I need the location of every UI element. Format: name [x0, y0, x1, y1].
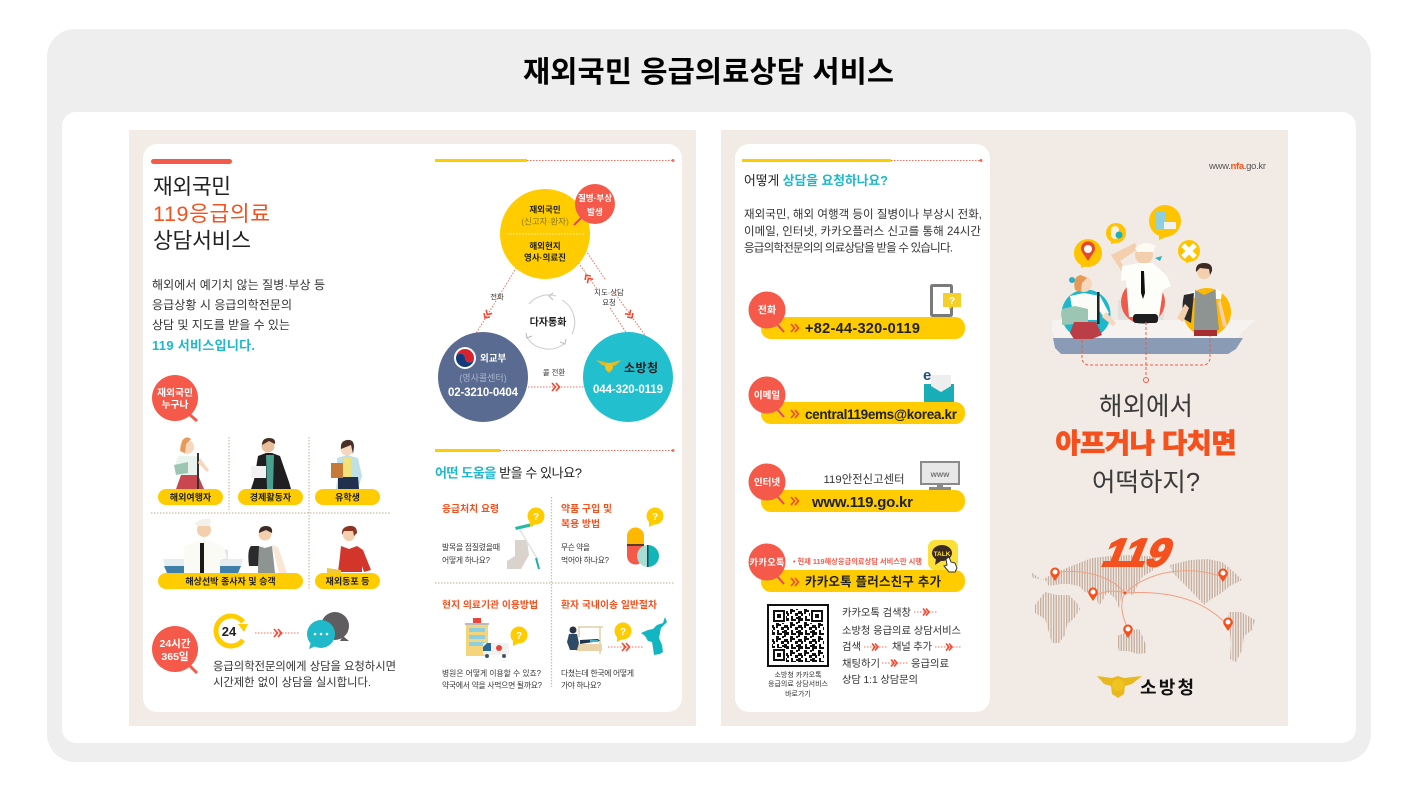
badge: illness or injury: 질병·부상 [578, 193, 612, 203]
KakaoTalk steps: 카카오톡 검색창 [842, 607, 912, 619]
icon: taegeuk [454, 347, 476, 369]
KakaoTalk steps: 채널 추가 [892, 641, 933, 653]
contact: KakaoTalk: 카카오톡 플러스친구 추가 [805, 574, 941, 589]
headline: what if hurt abroad: 해외에서 [1099, 393, 1193, 421]
text: 24 hour consultation: 응급의학전문의에게 상담을 요청하시면 [213, 659, 396, 673]
intro text: 119 서비스입니다. [152, 338, 255, 353]
target groups grid [151, 437, 390, 589]
person: overseas Korean [327, 526, 371, 574]
circle: citizens and local staff [500, 189, 590, 279]
intro text: 응급상황 시 응급의학전문의 [152, 298, 292, 312]
website url: www.nfa.go.kr [1208, 161, 1266, 172]
fire agency logo [1097, 676, 1194, 698]
icon: question: ? [652, 512, 658, 523]
multi-party call: 다자통화 [530, 316, 566, 328]
item: first aid: 응급처치 요령 [442, 502, 499, 515]
icon: chat bubbles [307, 612, 349, 649]
circle: citizens and local staff: 재외국민 [529, 204, 561, 214]
headline: what if hurt abroad: 어떡하지? [1092, 469, 1200, 497]
icon: monitor [921, 462, 959, 490]
icon: Kakao talk [928, 540, 958, 572]
KakaoTalk steps: 소방청 응급의료 상담서비스 [842, 625, 961, 637]
QR caption: 바로가기 [785, 689, 811, 698]
badge: illness or injury: 발생 [587, 207, 603, 217]
text: 24 hour consultation: 시간제한 없이 상담을 실시합니다. [213, 676, 371, 689]
title: 재외국민 응급의료상담 서비스 [523, 56, 894, 89]
contact: email: 이메일 [754, 390, 780, 402]
icon: emblem [1097, 676, 1142, 698]
item: medicine [561, 502, 664, 567]
contact: email [748, 367, 965, 424]
call labels: 지도·상담 [594, 288, 624, 297]
item: local hospitals: 병원은 어떻게 이용할 수 있죠? [442, 668, 542, 678]
icon: cast and crutch [507, 523, 539, 569]
circle: foreign ministry: 외교부 [480, 354, 506, 364]
icon: tablet: ? [949, 296, 955, 307]
group labels: 유학생 [335, 492, 360, 502]
badge: 24 hours 365 days: 24시간 [160, 638, 191, 650]
icon: question: ? [516, 631, 522, 642]
item: patient transfer: 다쳤는데 한국에 어떻게 [561, 668, 634, 678]
icon: 24 hour clock: 24 [222, 624, 237, 639]
item: first aid: 어떻게 하나요? [442, 555, 491, 565]
connector arrows [472, 248, 647, 391]
person: ship officer [184, 519, 227, 573]
circle: foreign ministry: (영사콜센터) [459, 373, 507, 383]
item: medicine: 복용 방법 [561, 517, 600, 530]
circle: fire agency [583, 332, 673, 422]
badge: overseas citizens: 재외국민 [157, 386, 193, 399]
speech bubbles [1074, 205, 1200, 268]
icon: envelope [923, 367, 954, 402]
heading: what help: 어떤 도움을 받을 수 있나요? [435, 466, 582, 480]
help grid [435, 497, 674, 690]
QR caption: 소방청 카카오톡 [774, 670, 822, 679]
contact: KakaoTalk: 카카오톡 [750, 556, 785, 568]
group labels: 해외여행자 [170, 492, 212, 502]
item: local hospitals: 현지 의료기관 이용방법 [442, 598, 538, 611]
person: passenger [248, 526, 287, 573]
group labels: 해상선박 종사자 및 승객 [185, 576, 276, 586]
circle: fire agency: 소방청 [624, 360, 658, 375]
inner white panel [62, 112, 1356, 743]
circle: fire agency: 044-320-0119 [593, 384, 663, 396]
route lines [1055, 571, 1228, 630]
icon: Kakao talk: TALK [934, 551, 951, 558]
KakaoTalk steps: 채팅하기 [842, 657, 880, 670]
icon: 24 hour clock [216, 616, 248, 646]
call labels: 요청 [602, 298, 616, 307]
intro text [152, 278, 325, 353]
icon: envelope: e [923, 367, 931, 384]
contact: phone: 전화 [758, 304, 776, 316]
item: local hospitals: 약국에서 약을 사먹으면 될까요? [442, 680, 543, 690]
group labels: 경제활동자 [250, 492, 292, 502]
icon: hospital and ambulance [465, 618, 509, 658]
arrow: to consultation [255, 629, 300, 637]
item: medicine: 무슨 약을 [561, 542, 590, 552]
call labels: 전화 [490, 292, 504, 302]
contact: internet: 인터넷 [754, 476, 780, 488]
contact: phone [748, 286, 965, 339]
divider bar: consultation flow [435, 159, 674, 162]
request description: 이메일, 인터넷, 카카오플러스 신고를 통해 24시간 [744, 224, 981, 238]
heading: service name [153, 175, 270, 253]
ship [163, 548, 243, 573]
heading: service name: 상담서비스 [153, 229, 251, 253]
text: 24 hour consultation [213, 659, 396, 689]
map pins [1050, 568, 1233, 638]
icon: monitor: www [930, 470, 950, 479]
badge: overseas citizens: 누구나 [161, 398, 189, 411]
headline: what if hurt abroad: 아프거나 다치면 [1056, 429, 1236, 459]
person: traveller [174, 437, 209, 489]
call labels: 콜 전환 [543, 368, 565, 377]
group labels [158, 489, 380, 589]
QR code [768, 605, 828, 666]
contact: internet: www.119.go.kr [811, 494, 913, 511]
arrow: to Korea [608, 643, 643, 651]
KakaoTalk steps: 검색 [842, 641, 861, 653]
dashed connectors [1082, 322, 1210, 382]
badge: overseas citizens [152, 375, 198, 421]
contact: KakaoTalk [748, 540, 965, 592]
icon: map of Korea [641, 617, 667, 655]
contact: email: central119ems@korea.kr [805, 407, 958, 422]
officer [1111, 243, 1171, 323]
multi-party call [526, 293, 575, 349]
divider bar: request [742, 159, 982, 162]
woman with book [1062, 275, 1116, 339]
icon: pills [627, 528, 659, 567]
item: first aid [442, 502, 544, 569]
illustration: bubbles, ship and travellers [1052, 205, 1256, 382]
call labels [490, 288, 624, 377]
headline: what if hurt abroad [1056, 393, 1236, 497]
icon: question: ? [533, 512, 539, 523]
badge: 24 hours 365 days: 365일 [161, 650, 189, 663]
circle: citizens and local staff: 해외현지 [529, 241, 561, 251]
KakaoTalk steps [842, 607, 961, 686]
intro text: 상담 및 지도를 받을 수 있는 [152, 318, 290, 332]
item: first aid: 발목을 접질렸을때 [442, 542, 500, 552]
accent bar [151, 159, 232, 164]
contact: phone: +82-44-320-0119 [805, 321, 920, 337]
circle: foreign ministry [438, 332, 528, 422]
panel: right leaflet page [721, 130, 1288, 726]
ship [1052, 300, 1256, 354]
traveller circles [1062, 280, 1231, 338]
item: patient transfer: 가야 하나요? [561, 680, 602, 690]
QR caption [768, 670, 829, 698]
panel: left leaflet page [129, 130, 696, 726]
divider bar: help section [435, 449, 674, 452]
request description: 응급의학전문의의 의료상담을 받을 수 있습니다. [744, 242, 953, 254]
badge: illness or injury [574, 184, 615, 225]
KakaoTalk steps: 응급의료 [911, 658, 949, 670]
item: local hospitals [442, 598, 543, 690]
circle: citizens and local staff: 영사·의료진 [524, 252, 566, 262]
request description [744, 208, 982, 254]
heading: how to request: 어떻게 상담을 요청하나요? [744, 173, 888, 188]
contact: internet: 119안전신고센터 [824, 473, 904, 486]
QR caption: 응급의료 상담서비스 [768, 679, 829, 688]
icon: emblem [596, 360, 621, 373]
icon: tablet [932, 286, 961, 316]
heading: service name: 재외국민 [153, 175, 231, 199]
intro text: 해외에서 예기치 않는 질병·부상 등 [152, 278, 325, 292]
circle: citizens and local staff: (신고자·환자) [521, 216, 569, 226]
item: medicine: 약품 구입 및 [561, 502, 612, 515]
person: business worker [251, 438, 291, 489]
item: patient transfer: 환자 국내이송 일반절차 [561, 598, 657, 611]
contact: internet [748, 462, 965, 512]
group labels: 재외동포 등 [326, 576, 369, 586]
diagram: three-way call [438, 184, 673, 422]
request description: 재외국민, 해외 여행객 등이 질병이나 부상시 전화, [744, 208, 982, 221]
person: student [331, 440, 362, 489]
circle: foreign ministry: 02-3210-0404 [448, 387, 519, 399]
KakaoTalk steps: 상담 1:1 상담문의 [842, 674, 918, 686]
fire agency logo: 소방청 [1140, 678, 1194, 698]
icon: patient in bed [567, 626, 603, 654]
continents [1031, 555, 1255, 662]
heading: service name: 119응급의료 [153, 202, 270, 226]
item: medicine: 먹어야 하나요? [561, 555, 610, 565]
world map [1031, 530, 1255, 662]
item: patient transfer [561, 598, 667, 690]
young man [1177, 263, 1227, 336]
icon: question: ? [620, 627, 626, 638]
contact: KakaoTalk: • 현재 119해상응급의료상담 서비스만 시행 [793, 557, 922, 566]
119 logo: 119 [1097, 530, 1180, 574]
badge: 24 hours 365 days [152, 626, 198, 673]
